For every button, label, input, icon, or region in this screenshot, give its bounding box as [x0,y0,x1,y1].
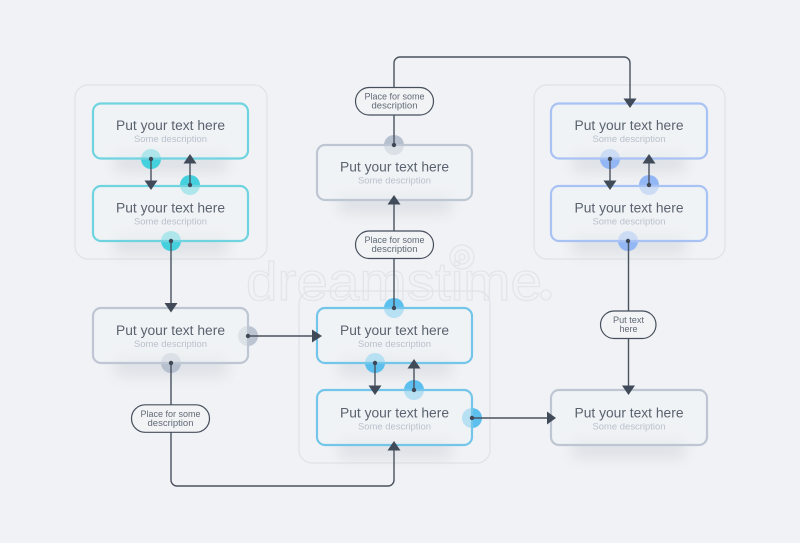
box: centre lower blue [317,390,472,445]
box: left lower grey [93,308,248,363]
box: left bottom: Put your text here [116,200,225,216]
panel: centre group [299,291,490,463]
pill label: right [600,311,656,338]
pill label: lower left: description [148,418,194,428]
box: centre upper blue: Put your text here [340,323,449,338]
box shadows [115,152,685,458]
pill label: middle centre [356,231,434,258]
connector lines [151,57,649,486]
pill label: lower left [132,405,210,432]
panel: right group [534,85,725,259]
box: centre top grey: Put your text here [340,160,449,174]
box: left bottom [93,186,248,241]
box: centre upper blue [317,308,472,363]
box: left lower grey: Some description [134,339,207,350]
pill label: middle centre: description [372,244,418,254]
box: left lower grey: Put your text here [116,323,225,338]
watermark: dreamstime [246,252,542,312]
panel: left group [75,85,267,259]
box: right bottom [551,186,707,241]
box: right lower grey: Some description [592,422,666,432]
pill label: top centre [356,88,434,115]
box: right top: Some description [592,134,666,145]
box: right bottom: Put your text here [574,200,684,216]
pill label: right: here [620,324,638,334]
connector dots [149,143,651,420]
box: left top: Some description [134,134,207,145]
box: right top: Put your text here [574,118,684,133]
node halos [141,135,659,428]
box: centre lower blue: Put your text here [340,406,449,420]
pill label: middle centre: Place for some [364,235,424,245]
box: right lower grey: Put your text here [574,406,684,420]
pill label: lower left: Place for some [140,409,200,419]
box: centre upper blue: Some description [358,339,431,350]
pill label: top centre: description [372,100,418,110]
box: right bottom: Some description [592,216,666,228]
box: left top: Put your text here [116,118,225,133]
pill label: top centre: Place for some [364,92,424,102]
box: right top [551,104,707,158]
box: left top [93,104,248,158]
arrowheads [144,98,656,450]
box: centre top grey [317,145,472,200]
box: centre lower blue: Some description [358,422,431,432]
box: left bottom: Some description [134,216,207,228]
box: right lower grey [551,390,707,445]
box: centre top grey: Some description [358,176,431,186]
pill label: right: Put text [613,315,645,325]
